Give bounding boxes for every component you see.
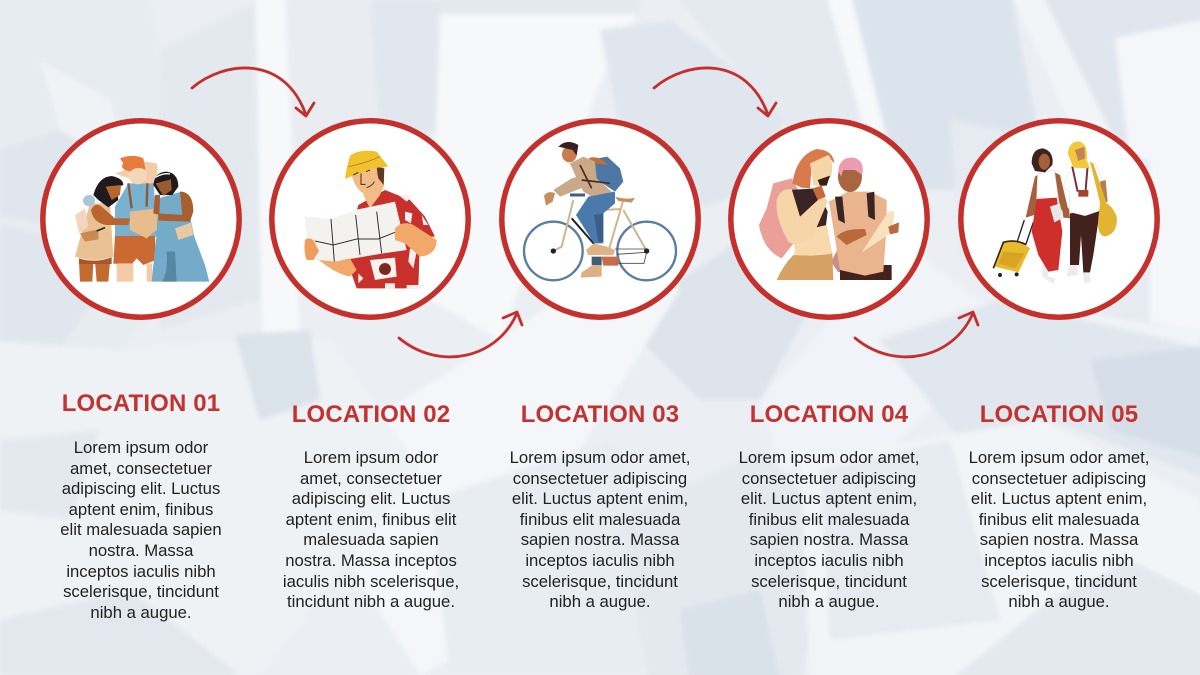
text: location 03: nibh a augue. (549, 592, 651, 611)
text: location 03: finibus elit malesuada (520, 510, 680, 529)
circle 4: two friends reading a map (731, 121, 927, 317)
circle 5: two women with luggage (961, 121, 1157, 317)
text: location 04: finibus elit malesuada (749, 510, 909, 529)
text: location 05: scelerisque, tincidunt (981, 572, 1137, 591)
heading: location 02: LOCATION 02 (292, 401, 450, 428)
text: location 04: consectetuer adipiscing (742, 469, 916, 488)
text: location 01: adipiscing elit. Luctus (62, 479, 220, 498)
text: location 03: Lorem ipsum odor amet, (510, 448, 690, 467)
text: location 01: inceptos iaculis nibh (66, 562, 216, 581)
text: location 02: nostra. Massa inceptos (285, 551, 457, 570)
text: location 02: amet, consectetuer (300, 469, 442, 488)
text: location 05: sapien nostra. Massa (980, 530, 1138, 549)
text: location 03: inceptos iaculis nibh (525, 551, 675, 570)
text: location 03: sapien nostra. Massa (521, 530, 679, 549)
text: location 01: aptent enim, finibus (69, 500, 213, 519)
arrow: location 4 to 5 (855, 312, 978, 357)
text: location 04: scelerisque, tincidunt (751, 572, 907, 591)
heading: location 05: LOCATION 05 (980, 401, 1138, 428)
text: location 02: adipiscing elit. Luctus (292, 489, 450, 508)
circle 1: group of three travellers (43, 121, 239, 317)
arrow: location 3 to 4 (654, 68, 776, 116)
text: location 01 (60, 438, 222, 622)
text: location 04: nibh a augue. (778, 592, 880, 611)
circle 3: cyclist (502, 121, 698, 317)
text: location 05: nibh a augue. (1008, 592, 1110, 611)
text: location 04 (739, 448, 919, 611)
text: location 01: nibh a augue. (90, 603, 192, 622)
text: location 02: iaculis nibh scelerisque, (283, 572, 459, 591)
text: location 03: scelerisque, tincidunt (522, 572, 678, 591)
text: location 01: Lorem ipsum odor (74, 438, 208, 457)
text: location 03 (510, 448, 690, 611)
text: location 01: elit malesuada sapien (60, 520, 222, 539)
text: location 05: consectetuer adipiscing (972, 469, 1146, 488)
text: location 02 (283, 448, 459, 611)
text: location 01: scelerisque, tincidunt (63, 582, 219, 601)
text: location 04: Lorem ipsum odor amet, (739, 448, 919, 467)
text: location 04: sapien nostra. Massa (750, 530, 908, 549)
text: location 02: malesuada sapien (303, 530, 439, 549)
text: location 01: nostra. Massa (89, 541, 193, 560)
text: location 05 (969, 448, 1149, 611)
text: location 03: elit. Luctus aptent enim, (512, 489, 688, 508)
text: location 02: aptent enim, finibus elit (286, 510, 456, 529)
heading: location 03: LOCATION 03 (521, 401, 679, 428)
arrow: location 2 to 3 (399, 312, 522, 357)
text: location 02: tincidunt nibh a augue. (287, 592, 455, 611)
text: location 05: finibus elit malesuada (979, 510, 1139, 529)
text: location 04: inceptos iaculis nibh (754, 551, 904, 570)
arrow: location 1 to 2 (192, 68, 314, 116)
heading: location 04: LOCATION 04 (750, 401, 908, 428)
text: location 03: consectetuer adipiscing (513, 469, 687, 488)
text: location 01: amet, consectetuer (70, 459, 212, 478)
circle 2: man with map (272, 121, 468, 317)
text: location 02: Lorem ipsum odor (304, 448, 438, 467)
text: location 05: elit. Luctus aptent enim, (971, 489, 1147, 508)
heading: location 01: LOCATION 01 (62, 390, 220, 417)
text: location 04: elit. Luctus aptent enim, (741, 489, 917, 508)
text: location 05: Lorem ipsum odor amet, (969, 448, 1149, 467)
text: location 05: inceptos iaculis nibh (984, 551, 1134, 570)
